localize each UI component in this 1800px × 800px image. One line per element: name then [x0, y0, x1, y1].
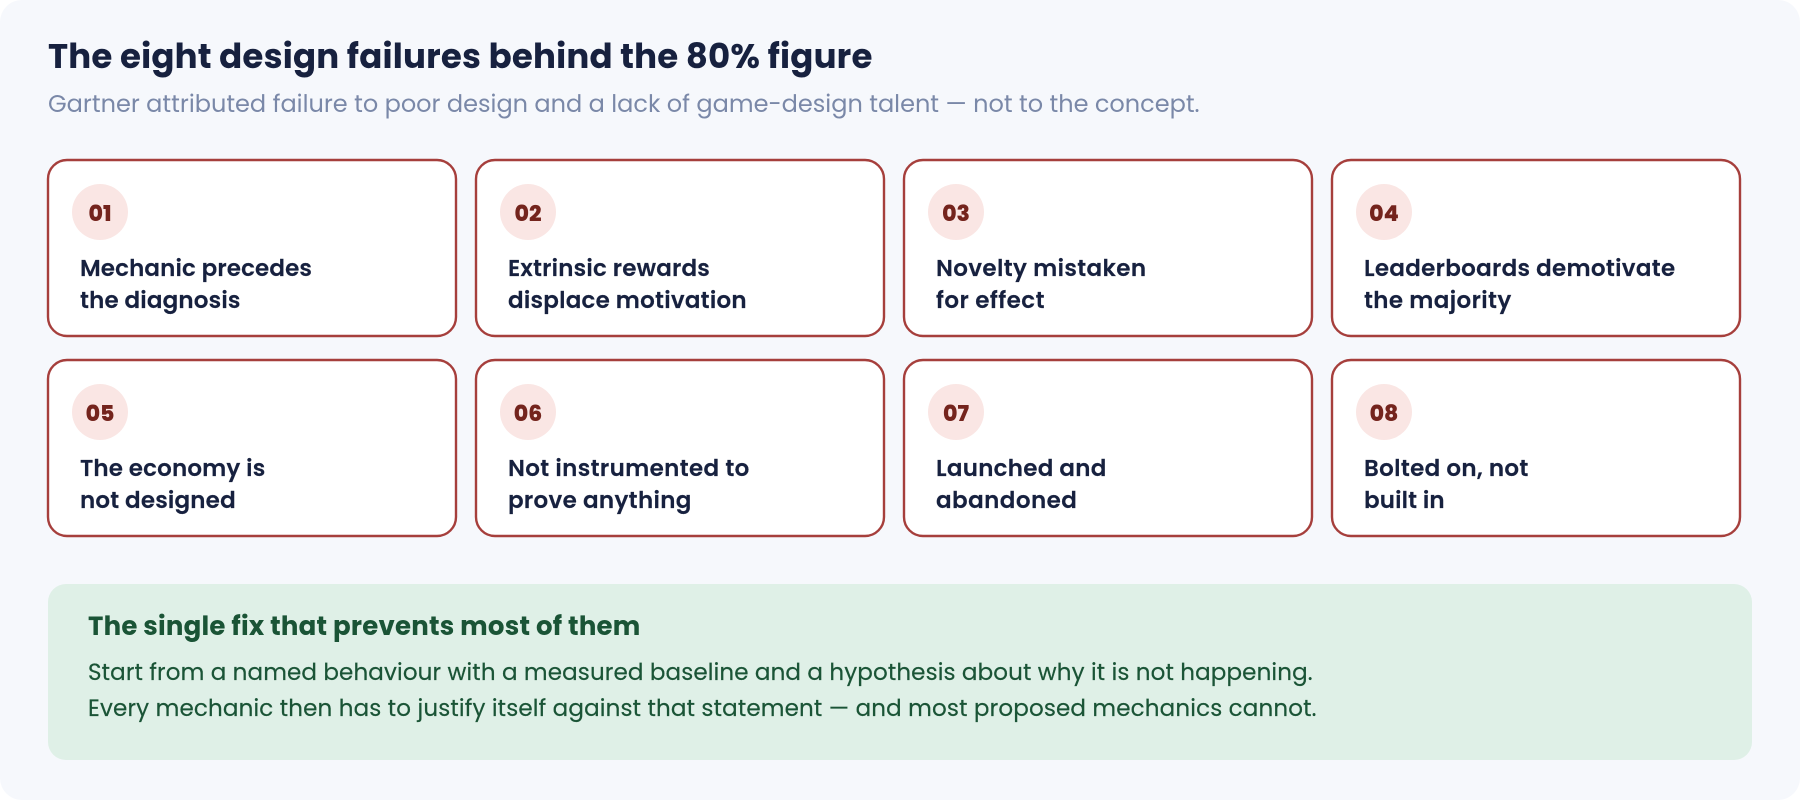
number badge 05: 05 [86, 398, 114, 429]
callout heading: The single fix that prevents most of them [88, 609, 641, 645]
card 08 label [1364, 453, 1529, 517]
callout body: Every mechanic then has to justify itself against that statement — and most proposed mechanics cannot. [88, 693, 1317, 725]
subtitle: Gartner attributed failure to poor design and a lack of game-design talent — not to the concept. [48, 88, 1200, 121]
card 06 label: prove anything [508, 485, 692, 517]
card 06 label: Not instrumented to [508, 453, 750, 485]
card 08 label: Bolted on, not [1364, 453, 1529, 485]
card 01 label: Mechanic precedes [80, 253, 312, 285]
number badge 07: 07 [943, 398, 969, 429]
card 04 [1330, 158, 1742, 338]
number badge 03: 03 [942, 198, 970, 229]
card 07 label [936, 453, 1107, 517]
card 04 label [1364, 253, 1675, 317]
number badge 03 [928, 184, 984, 240]
number badge 01: 01 [89, 198, 111, 229]
card 08 label: built in [1364, 485, 1445, 517]
card 05 label [80, 453, 265, 517]
card 02 label: displace motivation [508, 285, 747, 317]
card 07 label: Launched and [936, 453, 1107, 485]
number badge 02 [500, 184, 556, 240]
card 07 label: abandoned [936, 485, 1077, 517]
number badge 07 [928, 384, 984, 440]
callout body [88, 657, 1317, 725]
card 01 [46, 158, 458, 338]
card 03 [902, 158, 1314, 338]
number badge 06: 06 [514, 398, 542, 429]
card 02 label [508, 253, 747, 317]
number badge 04 [1356, 184, 1412, 240]
card 03 label: Novelty mistaken [936, 253, 1146, 285]
card 05 label: The economy is [80, 453, 265, 485]
card 05 [46, 358, 458, 538]
card 04 label: the majority [1364, 285, 1512, 317]
number badge 08: 08 [1370, 398, 1398, 429]
number badge 02: 02 [514, 198, 541, 229]
card 02 [474, 158, 886, 338]
card 04 label: Leaderboards demotivate [1364, 253, 1675, 285]
callout: the single fix [48, 584, 1752, 760]
number badge 01 [72, 184, 128, 240]
card 06 [474, 358, 886, 538]
card 02 label: Extrinsic rewards [508, 253, 710, 285]
card 01 label: the diagnosis [80, 285, 241, 317]
card 03 label: for effect [936, 285, 1045, 317]
card 05 label: not designed [80, 485, 236, 517]
number badge 08 [1356, 384, 1412, 440]
card 08 [1330, 358, 1742, 538]
card 01 label [80, 253, 312, 317]
number badge 06 [500, 384, 556, 440]
card 06 label [508, 453, 750, 517]
number badge 05 [72, 384, 128, 440]
card 03 label [936, 253, 1146, 317]
callout body: Start from a named behaviour with a measured baseline and a hypothesis about why it is not happening. [88, 657, 1313, 689]
card 07 [902, 358, 1314, 538]
number badge 04: 04 [1369, 198, 1399, 229]
title: The eight design failures behind the 80% figure [48, 32, 873, 80]
